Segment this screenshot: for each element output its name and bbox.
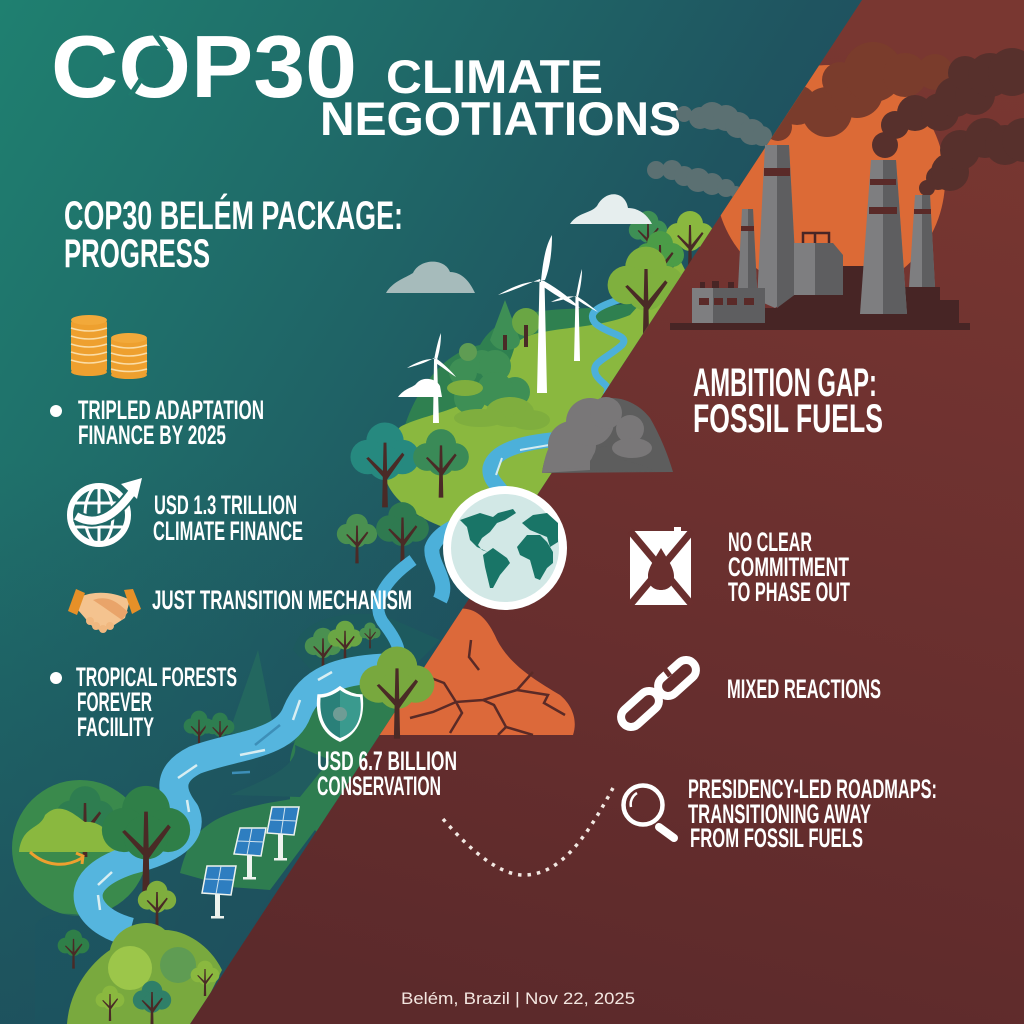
big tree [102, 786, 190, 894]
footer: place and date: Belém, Brazil | Nov 22, 2025 [401, 989, 635, 1008]
text: tripled adaptation finance [78, 395, 264, 450]
globe [443, 486, 567, 610]
text: climate finance [153, 490, 303, 546]
lime hill [384, 260, 700, 527]
O swoosh gaps [130, 30, 166, 96]
COP30 wordmark: COP30 [51, 17, 357, 116]
lime tree at dry land [360, 647, 434, 739]
middle river [432, 438, 575, 600]
illustration: green landscape [12, 211, 714, 1024]
upper river [592, 297, 628, 395]
green land at solar [180, 790, 345, 890]
left building [692, 288, 765, 323]
icon: magnifier [624, 786, 674, 838]
text: just transition mechanism: JUST TRANSITION MECHANISM [152, 585, 412, 615]
cracks [410, 640, 565, 735]
tree on disk [56, 786, 114, 857]
green land at shield [290, 685, 394, 832]
river highlights [496, 444, 555, 475]
illustration: wind turbines [407, 235, 598, 423]
icon: coins [71, 315, 147, 379]
text: tripled adaptation finance: TRIPLED ADAPTATION [78, 395, 264, 425]
text: no clear commitment: NO CLEAR [728, 527, 812, 557]
cloud grey [386, 262, 475, 293]
text: tropical forests forever facility [76, 662, 237, 742]
icon: amazon smile [30, 852, 83, 864]
text: tripled adaptation finance: FINANCE BY 2025 [78, 420, 226, 450]
solar panels [202, 807, 299, 918]
smoke: dark plumes [872, 48, 1024, 196]
text: conservation: USD 6.7 BILLION [317, 746, 457, 776]
shrubs on hill [449, 350, 530, 414]
icon: crossed fuel can [630, 527, 692, 605]
thin upper section of river [378, 560, 413, 672]
coal pile [542, 397, 673, 473]
conifer and small trees on hill [490, 300, 540, 350]
big turbine [498, 235, 580, 393]
dark bottom blob [63, 914, 80, 916]
right small stack [909, 195, 935, 287]
heading: ambition gap: FOSSIL FUELS [693, 397, 883, 441]
green disk hill [12, 780, 148, 916]
lighter lumps [542, 397, 652, 473]
bottom lime hill [67, 923, 222, 1024]
heading: progress [64, 193, 403, 276]
factory [670, 145, 970, 330]
second turbine [551, 269, 598, 361]
heading: progress: PROGRESS [64, 232, 210, 276]
main river [88, 668, 385, 932]
CLIMATE: CLIMATE [386, 50, 603, 103]
text: tropical forests forever facility: FOREVER [77, 687, 152, 717]
tank [794, 243, 843, 295]
heading: ambition gap [693, 361, 883, 441]
icon: broken chain [617, 656, 700, 731]
text: presidency-led roadmaps: TRANSITIONING AWAY [688, 799, 871, 829]
text: climate finance: CLIMATE FINANCE [153, 516, 303, 546]
river dashes [98, 672, 332, 910]
small river-side tree [138, 881, 176, 928]
text: conservation [317, 746, 457, 801]
continents [460, 509, 558, 588]
icon: handshake [68, 589, 141, 633]
trees beside hill [337, 422, 469, 567]
tall stack [757, 145, 797, 308]
text: mixed reactions: MIXED REACTIONS [727, 674, 881, 704]
bottom hill bushes [96, 946, 219, 1024]
third turbine [407, 333, 456, 423]
icon: dry cracked land [375, 609, 575, 735]
small tree lower left [58, 930, 89, 969]
lime bush [19, 809, 118, 852]
text: no clear commitment: COMMITMENT [728, 552, 849, 582]
sun [720, 65, 944, 270]
text: tropical forests forever facility: TROPICAL FORESTS [76, 662, 237, 692]
NEGOTIATIONS: NEGOTIATIONS [320, 92, 681, 145]
cloud white [398, 379, 442, 397]
icon: globe with arrow [70, 478, 142, 544]
text: no clear commitment [728, 527, 850, 607]
cloud top [570, 194, 652, 224]
text: presidency-led roadmaps [688, 774, 937, 853]
title [51, 17, 681, 145]
river darker dashes [232, 725, 280, 773]
text: tropical forests forever facility: FACIILITY [77, 712, 154, 742]
heading: ambition gap: AMBITION GAP: [693, 361, 877, 405]
dark lower patch [293, 614, 440, 680]
conifers [232, 651, 296, 745]
small left stack [738, 209, 757, 288]
bullet [50, 405, 62, 417]
heading: progress: COP30 BELÉM PACKAGE: [64, 193, 403, 238]
text: climate finance: USD 1.3 TRILLION [154, 490, 297, 520]
back hill [405, 304, 650, 424]
text: no clear commitment: TO PHASE OUT [728, 577, 850, 607]
clouds [386, 194, 652, 397]
factory base [670, 266, 970, 330]
forest trees [184, 710, 234, 744]
text: conservation: CONSERVATION [317, 771, 441, 801]
smoke: grey plumes [647, 102, 772, 198]
top trees [608, 211, 714, 341]
small trees in patch [304, 620, 380, 666]
lime shrubs [447, 343, 550, 430]
icon: shield [319, 688, 361, 740]
dark land gap [266, 745, 330, 797]
smoke: brown plumes [771, 65, 909, 141]
bullet [50, 672, 62, 684]
dotted path [443, 788, 613, 875]
text: presidency-led roadmaps: FROM FOSSIL FUELS [690, 823, 863, 853]
right big stack [860, 160, 907, 314]
